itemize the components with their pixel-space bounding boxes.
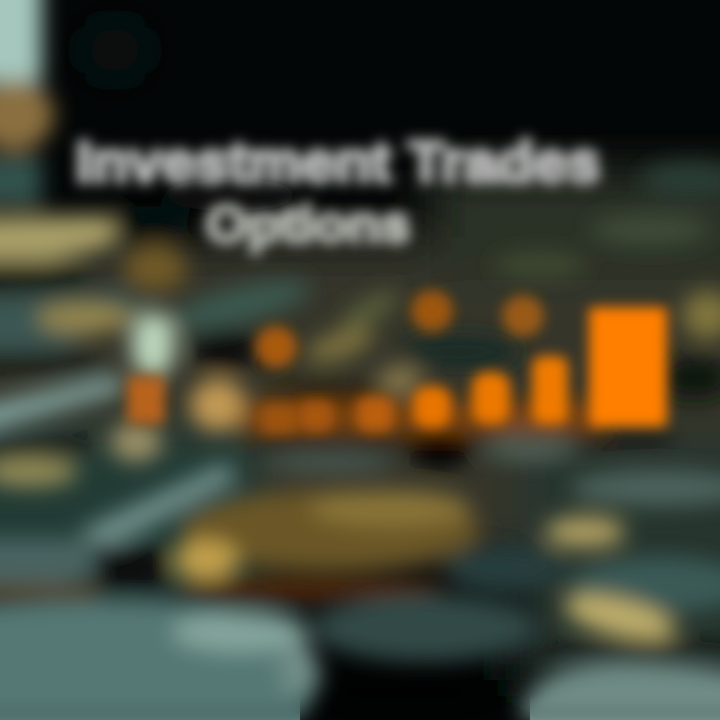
right stacks	[480, 162, 720, 720]
title: Investment Trades	[76, 130, 600, 195]
bottom edge fill: front coin	[0, 690, 300, 720]
dark strip beneath bars	[250, 438, 670, 446]
dot marker 3	[502, 295, 544, 337]
left stacks	[0, 215, 238, 599]
bar 2	[260, 404, 298, 434]
bar 4	[356, 396, 394, 432]
bar 3	[298, 400, 334, 432]
title: Options	[206, 196, 410, 254]
bottom edge fill: right coin	[530, 695, 720, 720]
dot marker 2	[411, 290, 453, 332]
bar chart: orange bars	[127, 290, 667, 434]
title	[76, 130, 600, 254]
front large coin	[0, 597, 330, 720]
brown band behind bars	[240, 402, 600, 432]
bar 5	[413, 386, 451, 428]
bar 7	[532, 356, 568, 424]
centre coin edges	[110, 179, 520, 403]
dot marker 1	[255, 326, 297, 368]
centre gold coin	[174, 432, 565, 662]
bar 1	[127, 376, 165, 424]
bar 8	[589, 307, 667, 427]
left top column	[0, 0, 54, 207]
pale coin near chart left	[131, 311, 246, 431]
bar 6	[472, 372, 510, 424]
